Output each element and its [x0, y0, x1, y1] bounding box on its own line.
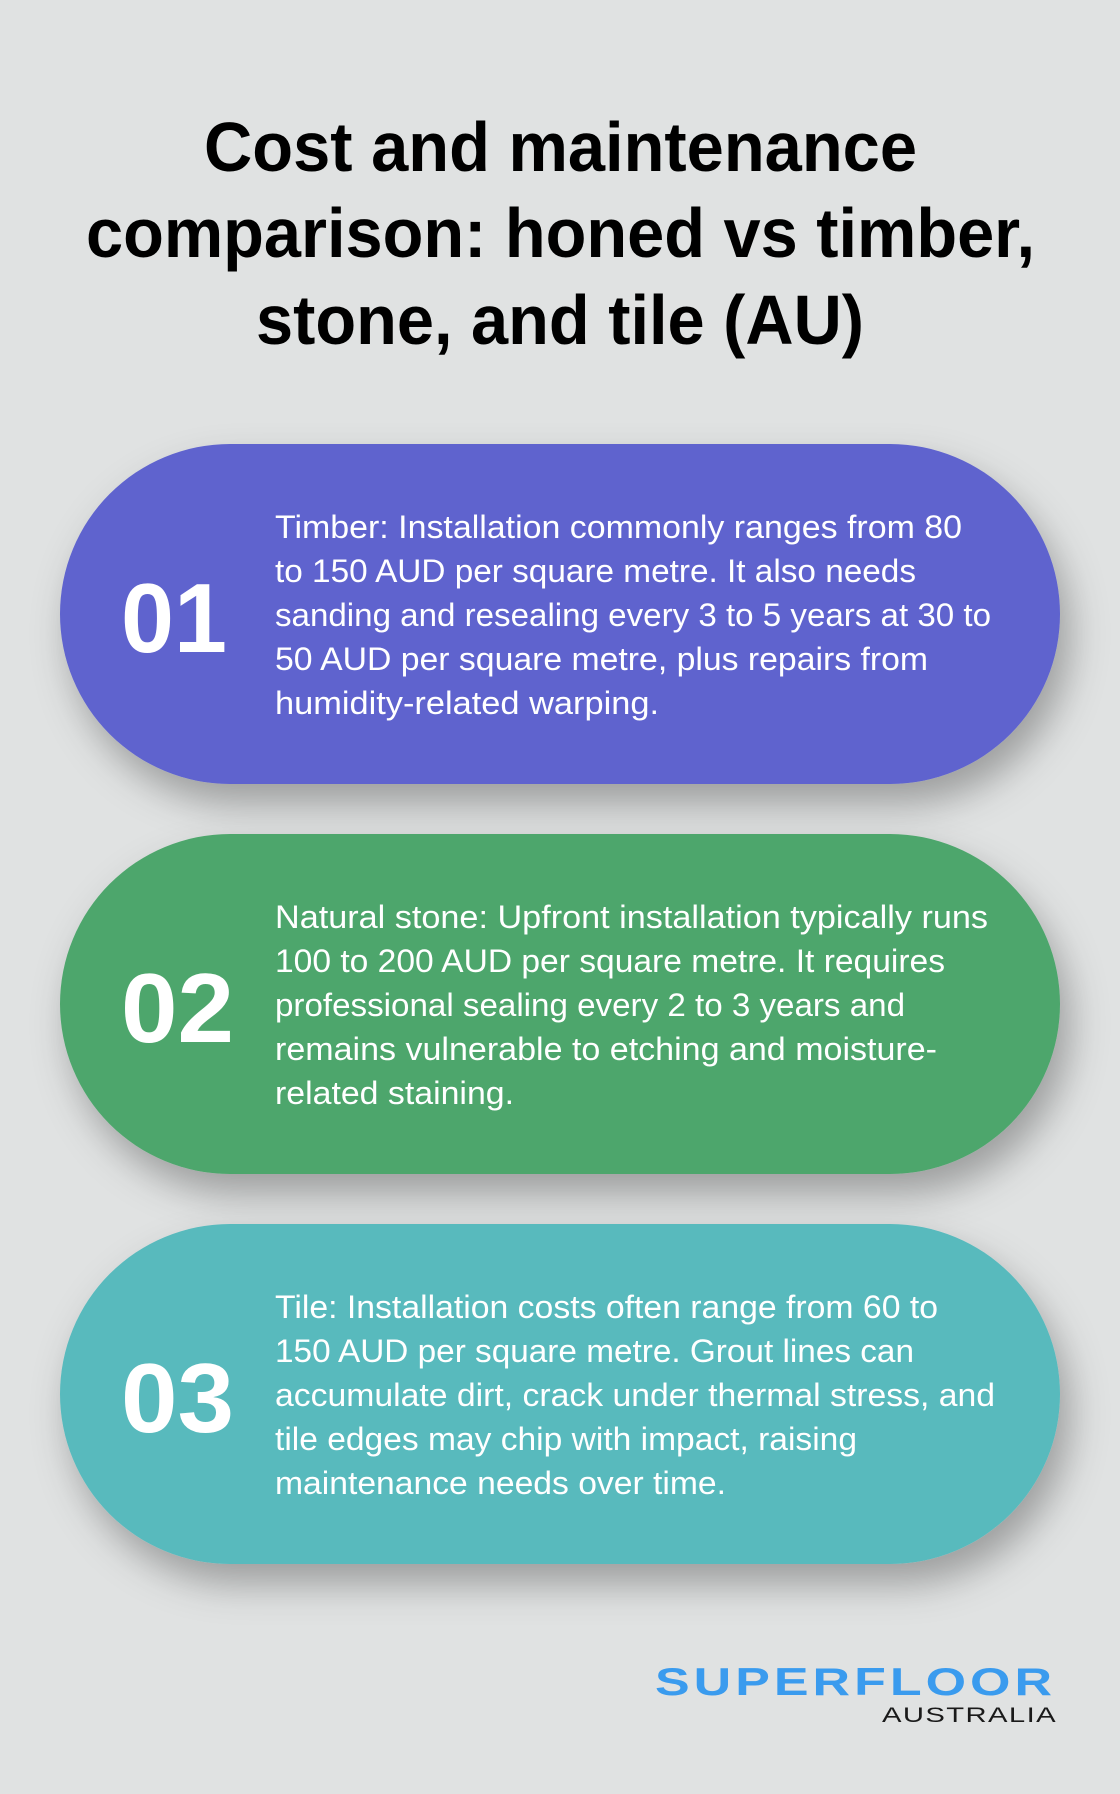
- pill background: natural stone: [60, 834, 1060, 1174]
- panel: timber: [60, 444, 1060, 784]
- text: timber: sanding and resealing every 3 to 5 years at 30 to: [275, 597, 991, 633]
- text: natural stone: professional sealing every 2 to 3 years and: [275, 987, 905, 1023]
- text: tile: maintenance needs over time.: [275, 1465, 726, 1501]
- title: stone, and tile (AU): [256, 281, 864, 359]
- text: natural stone: Natural stone: Upfront installation typically runs: [275, 899, 988, 935]
- title: [86, 108, 1035, 359]
- text: natural stone: remains vulnerable to etching and moisture-: [275, 1031, 937, 1067]
- panel: tile: [60, 1224, 1060, 1564]
- number 02: 02: [121, 953, 234, 1063]
- logo: Superfloor Australia: AUSTRALIA: [882, 1704, 1057, 1727]
- logo: Superfloor Australia: SUPERFLOOR: [655, 1661, 1056, 1704]
- text: tile: 150 AUD per square metre. Grout lines can: [275, 1333, 914, 1369]
- text: natural stone: related staining.: [275, 1075, 514, 1111]
- number 03: 03: [121, 1343, 234, 1453]
- text: timber: to 150 AUD per square metre. It also needs: [275, 553, 916, 589]
- text: natural stone: [275, 899, 988, 1111]
- text: tile: Tile: Installation costs often range from 60 to: [275, 1289, 938, 1325]
- text: timber: 50 AUD per square metre, plus repairs from: [275, 641, 928, 677]
- number 01: 01: [121, 563, 227, 673]
- text: timber: [275, 509, 991, 721]
- text: natural stone: 100 to 200 AUD per square metre. It requires: [275, 943, 945, 979]
- text: tile: tile edges may chip with impact, raising: [275, 1421, 857, 1457]
- pill background: tile: [60, 1224, 1060, 1564]
- panel: natural stone: [60, 834, 1060, 1174]
- text: timber: humidity-related warping.: [275, 685, 659, 721]
- text: timber: Timber: Installation commonly ranges from 80: [275, 509, 962, 545]
- text: tile: [275, 1289, 995, 1501]
- text: tile: accumulate dirt, crack under thermal stress, and: [275, 1377, 995, 1413]
- logo: Superfloor Australia: [655, 1661, 1057, 1727]
- title: Cost and maintenance: [204, 108, 917, 186]
- pill background: timber: [60, 444, 1060, 784]
- title: comparison: honed vs timber,: [86, 194, 1035, 272]
